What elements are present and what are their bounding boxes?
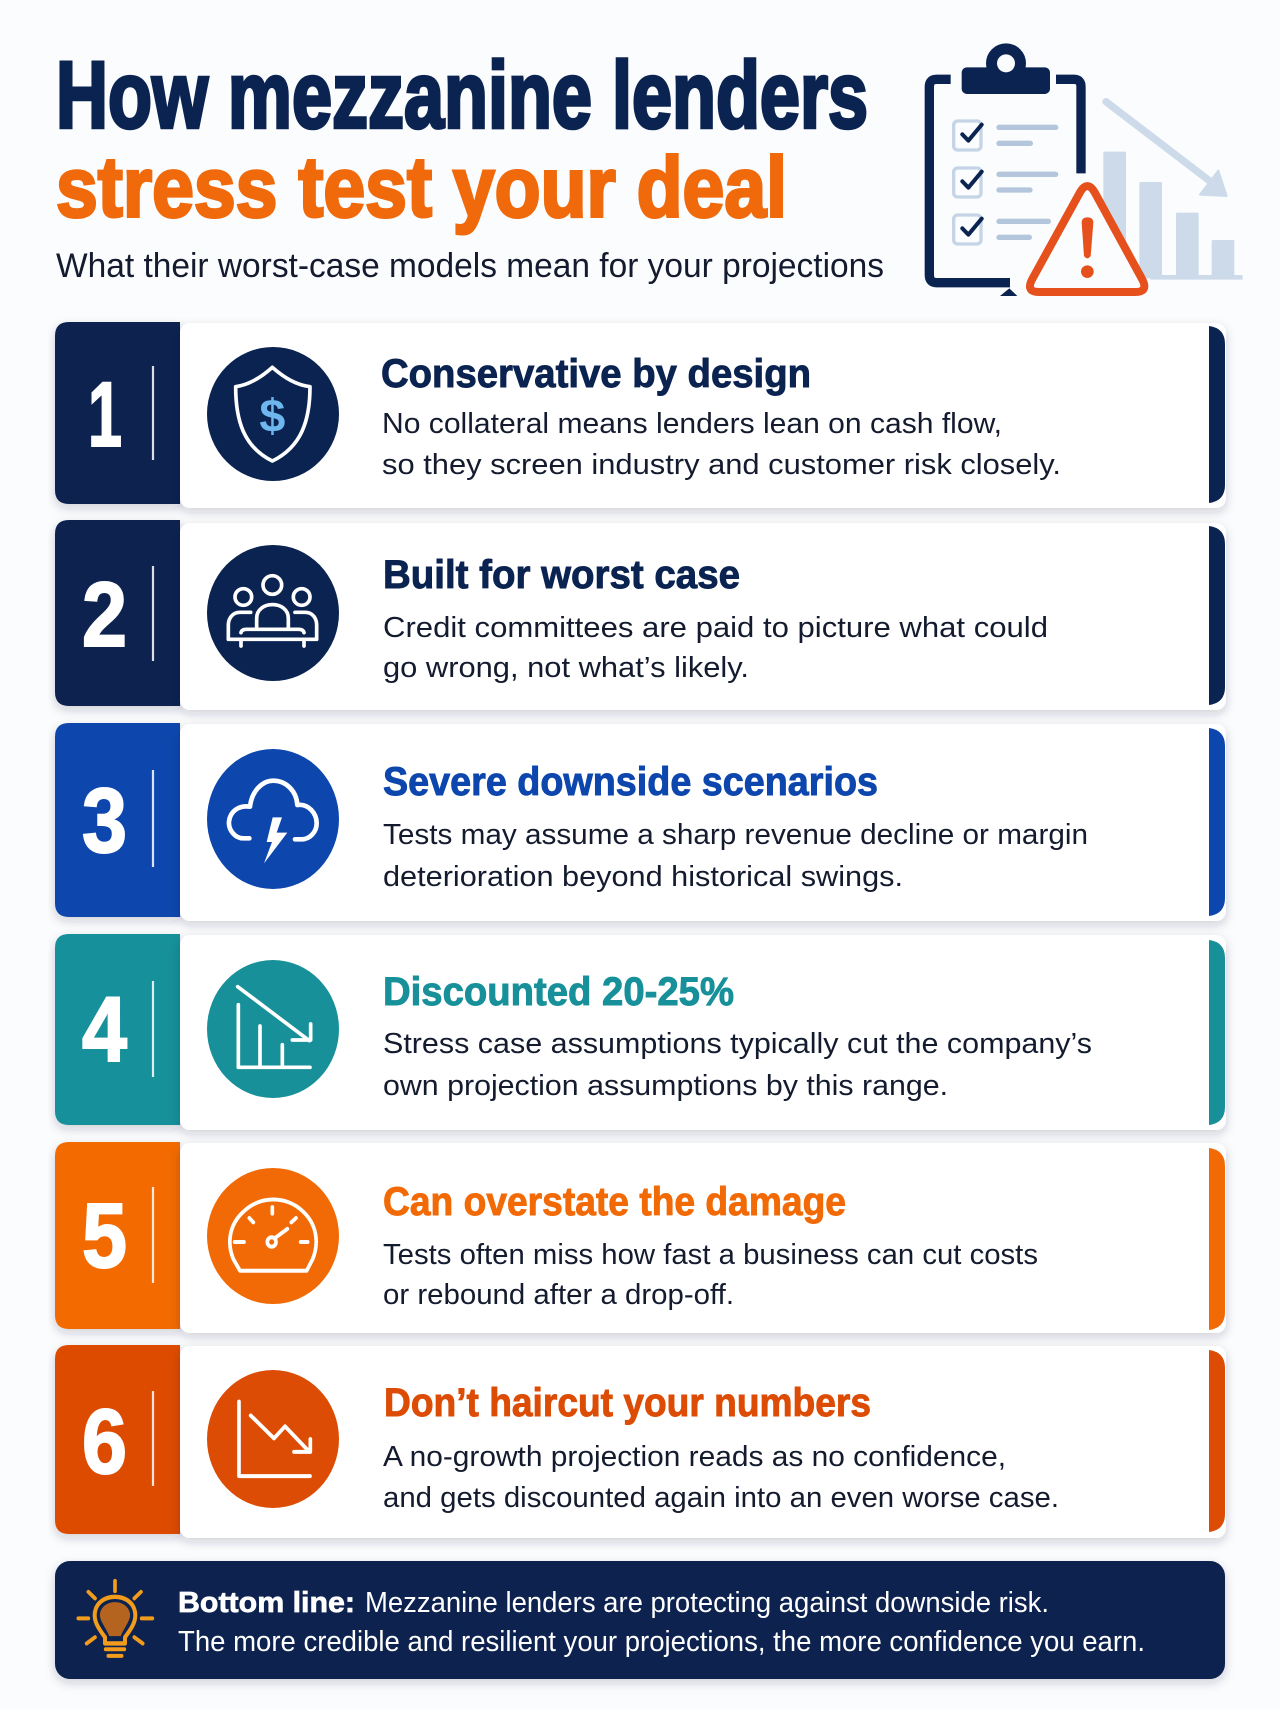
card 1 (180, 323, 1226, 508)
panel: step 6 don't haircut your numbers (55, 1345, 1226, 1538)
icon: clipboard, declining chart and warning triangle (929, 43, 1243, 296)
step 3 heading: Severe downside scenarios (383, 760, 878, 804)
number block 5: 5 (82, 1185, 127, 1287)
icon: committee people at table (207, 545, 339, 681)
panel: step 5 can overstate the damage (55, 1142, 1226, 1333)
step 3 body: deterioration beyond historical swings. (383, 861, 903, 893)
step 5 body (383, 1239, 1038, 1311)
step 1 body: so they screen industry and customer risk closely. (382, 449, 1061, 481)
icon: falling bar chart (207, 960, 339, 1098)
icon: shield with dollar: $ (259, 389, 285, 441)
callout text: Bottom line: (178, 1587, 355, 1619)
icon: light bulb (78, 1581, 152, 1656)
clipboard (929, 43, 1081, 296)
step 6 body (383, 1441, 1059, 1514)
accent bar 1 (1209, 326, 1225, 503)
step 1 body (382, 408, 1061, 481)
accent bar 5 (1209, 1148, 1225, 1330)
panel: step 2 built for worst case (55, 520, 1226, 710)
title line 2: stress test your deal (56, 140, 787, 236)
step 4 heading: Discounted 20-25% (383, 970, 734, 1014)
step 2 body: Credit committees are paid to picture what could (383, 612, 1048, 644)
card 2 (180, 523, 1226, 710)
number block 5 (55, 1142, 180, 1329)
accent bar 2 (1209, 526, 1225, 705)
icon: speedometer gauge (207, 1168, 339, 1304)
header: title and subtitle (56, 42, 884, 285)
step 2 heading: Built for worst case (383, 553, 740, 597)
step 3 body (383, 819, 1088, 893)
card 6 (180, 1346, 1226, 1538)
step 2 body: go wrong, not what’s likely. (383, 652, 749, 684)
card 4 (180, 935, 1226, 1130)
number block 3: 3 (82, 770, 127, 872)
accent bar 3 (1209, 728, 1225, 916)
number block 4 (55, 934, 180, 1125)
number block 2 (55, 520, 180, 706)
step 6 body: A no-growth projection reads as no confidence, (383, 1441, 1006, 1473)
callout text: The more credible and resilient your projections, the more confidence you earn. (178, 1626, 1145, 1658)
number block 6: 6 (82, 1391, 127, 1493)
step 3 body: Tests may assume a sharp revenue decline or margin (383, 819, 1088, 851)
panel: step 1 conservative by design (55, 322, 1226, 508)
step 1 body: No collateral means lenders lean on cash flow, (382, 408, 1002, 440)
step 4 body: own projection assumptions by this range. (383, 1070, 948, 1102)
card 5 (180, 1143, 1226, 1333)
callout: bottom line (55, 1561, 1225, 1679)
step 5 body: or rebound after a drop-off. (383, 1279, 734, 1311)
callout text: Mezzanine lenders are protecting against downside risk. (365, 1587, 1049, 1619)
declining bar chart (1103, 102, 1243, 280)
icon: shield with dollar (207, 347, 339, 481)
panel: step 4 discounted 20-25% (55, 934, 1226, 1130)
step 6 heading: Don’t haircut your numbers (384, 1381, 871, 1425)
number block 1 (55, 322, 180, 504)
accent bar 4 (1209, 940, 1225, 1125)
number block 6 (55, 1345, 180, 1534)
step 6 body: and gets discounted again into an even worse case. (383, 1482, 1059, 1514)
step 4 body: Stress case assumptions typically cut the company’s (383, 1028, 1092, 1060)
step 5 body: Tests often miss how fast a business can cut costs (383, 1239, 1038, 1271)
number block 4: 4 (82, 979, 127, 1081)
step 1 heading: Conservative by design (381, 352, 811, 396)
icon: storm cloud (207, 749, 339, 889)
step 5 heading: Can overstate the damage (383, 1180, 846, 1224)
step 2 body (383, 612, 1048, 684)
callout background (55, 1561, 1225, 1679)
card 3 (180, 724, 1226, 921)
title line 1: How mezzanine lenders (56, 42, 868, 148)
number block 2: 2 (82, 564, 127, 666)
icon: zigzag decline chart (207, 1370, 339, 1508)
panel: step 3 severe downside scenarios (55, 723, 1226, 921)
step 4 body (383, 1028, 1092, 1102)
accent bar 6 (1209, 1350, 1225, 1532)
subtitle: What their worst-case models mean for your projections (56, 247, 884, 285)
callout text (178, 1587, 1145, 1658)
number block 1: 1 (88, 364, 122, 466)
warning triangle (1030, 186, 1144, 292)
number block 3 (55, 723, 180, 917)
